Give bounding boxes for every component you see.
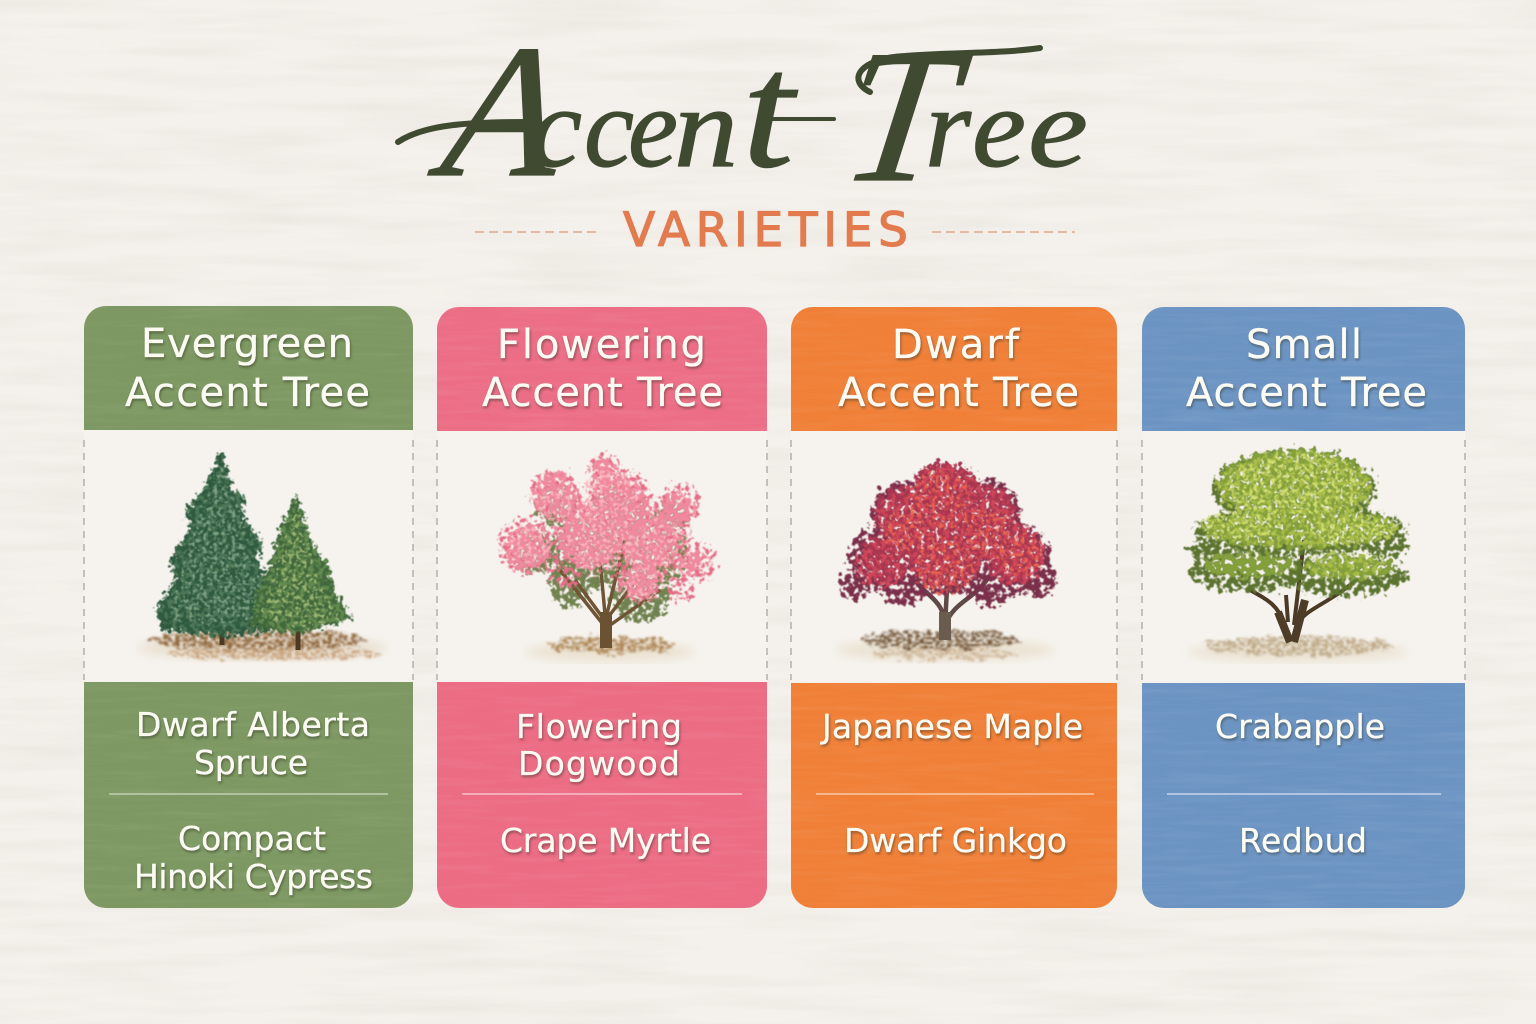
- evergreen image area: [84, 430, 413, 682]
- title: A: [421, 7, 579, 217]
- dwarf labels: [820, 322, 1083, 860]
- evergreen labels: Evergreen: [141, 321, 353, 367]
- title: T: [832, 12, 979, 222]
- dwarf examples background: [791, 683, 1117, 908]
- evergreen labels: Dwarf Alberta: [136, 705, 370, 744]
- small examples background: [1142, 683, 1465, 908]
- flowering header: [437, 307, 767, 431]
- tree: evergreen spruces: [137, 450, 387, 660]
- evergreen labels: Accent Tree: [125, 370, 370, 416]
- small header: [1142, 307, 1465, 431]
- title flourishes: [398, 48, 1040, 142]
- title: e: [628, 64, 678, 191]
- title: n: [674, 64, 738, 191]
- small labels: [1186, 322, 1427, 860]
- title: c: [584, 64, 634, 191]
- panel: small: [1142, 307, 1465, 908]
- title: [421, 7, 1088, 222]
- evergreen labels: Spruce: [194, 743, 308, 782]
- panel: dwarf: [791, 307, 1117, 908]
- dwarf labels: Accent Tree: [838, 370, 1079, 416]
- small labels: Crabapple: [1215, 707, 1385, 746]
- title: e: [972, 64, 1026, 191]
- flowering examples background: [437, 682, 767, 908]
- tree: flowering dogwood: [497, 454, 718, 662]
- dwarf header: [791, 307, 1117, 431]
- panel: flowering: [437, 307, 767, 908]
- title: t: [742, 19, 799, 202]
- evergreen labels: Hinoki Cypress: [134, 857, 373, 896]
- dwarf image area: [791, 431, 1117, 682]
- title: c: [530, 64, 582, 191]
- dwarf labels: Japanese Maple: [820, 707, 1083, 746]
- flowering image area: [437, 431, 767, 682]
- small labels: Redbud: [1239, 821, 1367, 860]
- tree: small green: [1188, 448, 1409, 662]
- flowering labels: [482, 322, 723, 860]
- flowering labels: Flowering: [497, 322, 706, 368]
- flowering labels: Crape Myrtle: [500, 821, 711, 860]
- title: r: [925, 64, 972, 191]
- evergreen examples background: [84, 682, 413, 908]
- title: e: [1028, 64, 1088, 191]
- subtitle: varieties: VARIETIES: [623, 203, 908, 258]
- flowering labels: Accent Tree: [482, 370, 723, 416]
- evergreen labels: Compact: [178, 819, 326, 858]
- small labels: Accent Tree: [1186, 370, 1427, 416]
- dwarf labels: Dwarf: [892, 322, 1020, 368]
- flowering labels: Flowering: [516, 707, 682, 746]
- small image area: [1142, 431, 1465, 683]
- evergreen header: [84, 306, 413, 430]
- evergreen labels: [125, 321, 373, 896]
- dwarf labels: Dwarf Ginkgo: [844, 821, 1067, 860]
- panel: evergreen: [84, 306, 413, 908]
- flowering labels: Dogwood: [518, 744, 680, 783]
- tree: japanese maple: [835, 461, 1056, 661]
- small labels: Small: [1246, 322, 1362, 368]
